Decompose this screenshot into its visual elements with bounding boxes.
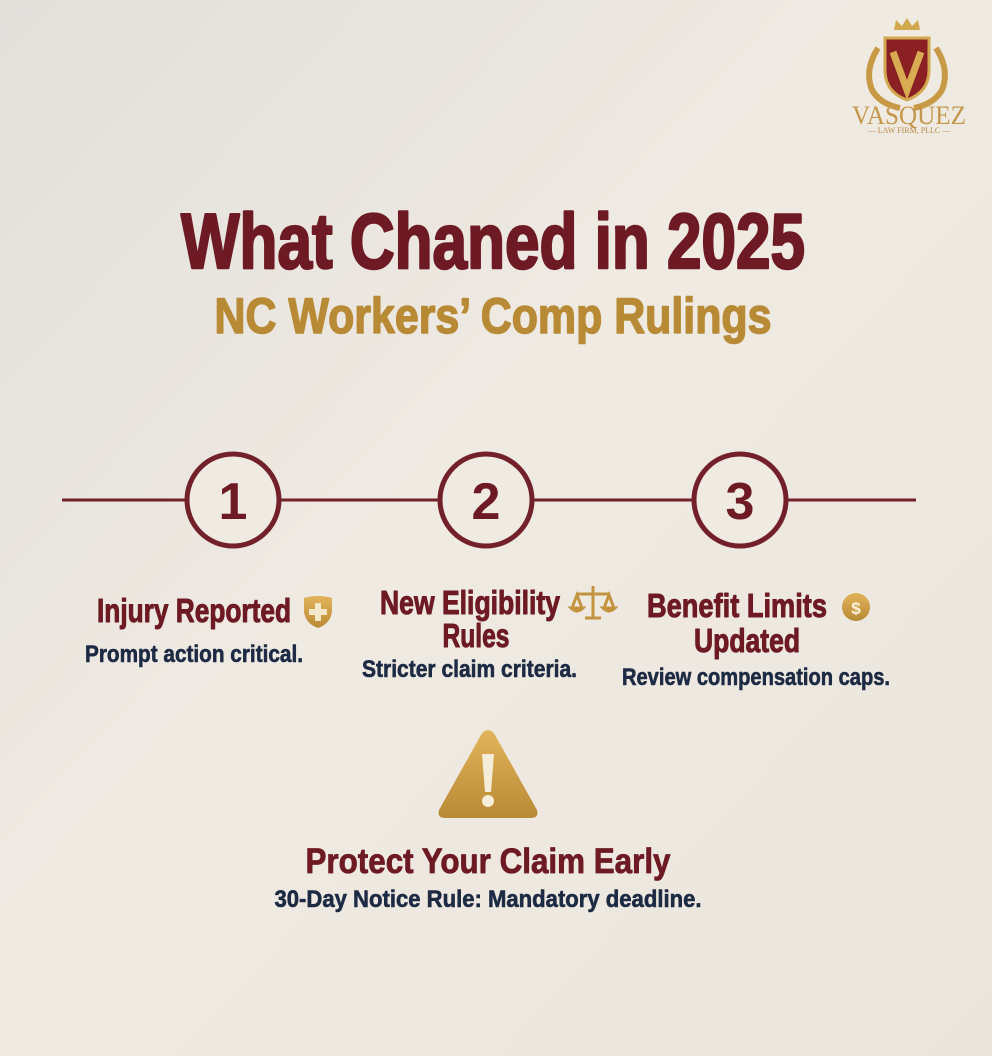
callout heading: Protect Your Claim Early [306,842,671,881]
step 1 circle: 1 [219,473,247,531]
callout text: 30-Day Notice Rule: Mandatory deadline. [274,886,702,913]
timeline [62,454,916,546]
logo: VASQUEZ [852,101,966,130]
step 2 text: Stricter claim criteria. [362,656,577,683]
icon: scales [571,586,615,618]
icon: coin: $ [851,599,861,618]
logo: — LAW FIRM, PLLC — [867,126,951,135]
step 3 text: Benefit Limits [647,587,827,624]
step 2 circle [440,454,532,546]
step 2 text: New Eligibility [380,584,561,621]
step 2 text [362,584,615,683]
step 2 text: Rules [442,617,510,654]
title: What Chaned in 2025 [181,197,805,285]
step 1 text [85,592,332,668]
step 1 circle [187,454,279,546]
step 3 text: Review compensation caps. [622,664,890,691]
step 2 circle: 2 [472,473,500,531]
subtitle: NC Workers’ Comp Rulings [214,288,772,344]
icon: shield [304,596,332,628]
step 3 circle [694,454,786,546]
icon: warning triangle [439,730,537,818]
icon: coin [842,593,870,621]
logo [852,18,966,135]
step 3 text: Updated [694,622,800,659]
step 1 text: Prompt action critical. [85,641,303,668]
step 3 text [622,587,890,691]
step 3 circle: 3 [726,473,754,531]
step 1 text: Injury Reported [97,592,291,629]
